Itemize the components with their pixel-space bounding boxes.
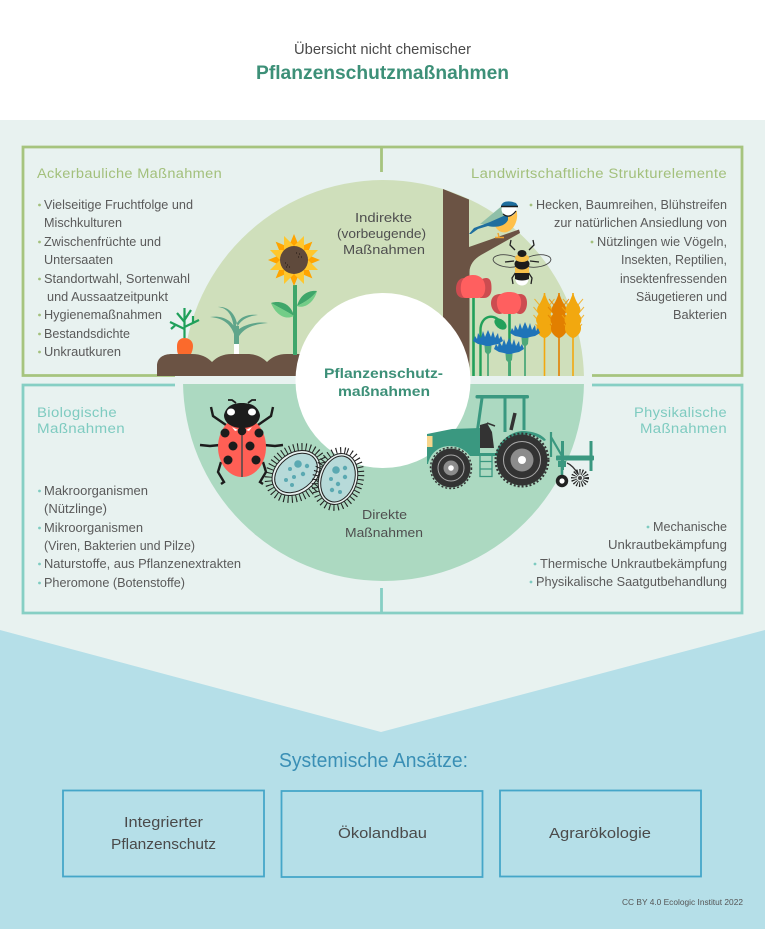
- centre label: maßnahmen: [338, 383, 430, 399]
- list: Physikalische Saatgutbehandlung: [536, 575, 727, 589]
- list: Mechanische: [653, 520, 727, 534]
- icon: carrot: [170, 308, 199, 354]
- icon: leek: [210, 307, 268, 354]
- box: Integrierter Pflanzenschutz: Integrierter: [124, 814, 203, 831]
- icon: ladybug: [200, 400, 283, 484]
- box: Integrierter Pflanzenschutz: Pflanzenschutz: [111, 836, 216, 853]
- list: Mischkulturen: [44, 216, 122, 230]
- list: Zwischenfrüchte und: [44, 235, 161, 249]
- heading: Maßnahmen: [640, 421, 727, 436]
- panel: pale background band: [0, 120, 765, 740]
- icon: microorganism right: [309, 446, 367, 512]
- frame: upper panels outline: [23, 147, 742, 376]
- list: Vielseitige Fruchtfolge und: [44, 198, 193, 212]
- box: Agrarökologie: [500, 790, 701, 876]
- icon: microorganism left: [259, 437, 333, 509]
- icon: bumblebee: [492, 240, 552, 286]
- panel: Physikalische Maßnahmen: [530, 405, 727, 589]
- frame: lower panels outline: [23, 385, 742, 613]
- list: Hygienemaßnahmen: [44, 308, 162, 322]
- list: Untersaaten: [44, 253, 113, 267]
- title: Übersicht nicht chemischer: [294, 40, 471, 58]
- label: direct measures: Maßnahmen: [345, 525, 423, 540]
- list: (Nützlinge): [44, 502, 107, 516]
- label: direct measures: Direkte: [362, 507, 407, 522]
- icon: white centre circle: [296, 293, 470, 468]
- list: Standortwahl, Sortenwahl: [44, 272, 190, 286]
- label: indirect measures: Maßnahmen: [343, 242, 425, 257]
- heading: Maßnahmen: [37, 421, 125, 436]
- credit: CC BY 4.0 Ecologic Institut 2022: [622, 897, 743, 907]
- centre label: Pflanzenschutz-: [324, 365, 443, 381]
- list: Hecken, Baumreihen, Blühstreifen: [536, 198, 727, 212]
- centre label: [324, 365, 443, 399]
- list: [530, 520, 727, 589]
- icon: tree: [443, 189, 520, 376]
- panel: upper half circle, indirect measures: [188, 180, 584, 376]
- title: [256, 40, 509, 84]
- panel: Ackerbauliche Maßnahmen: [37, 166, 222, 359]
- label: indirect measures: (vorbeugende): [337, 226, 426, 241]
- heading: [634, 405, 727, 436]
- list: [38, 198, 193, 359]
- box: Ökolandbau: Ökolandbau: [338, 824, 427, 842]
- box: Agrarökologie: Agrarökologie: [549, 825, 651, 842]
- label: direct measures: [345, 507, 423, 540]
- box: Integrierter Pflanzenschutz: [63, 790, 264, 876]
- icon: sunflower: [268, 234, 320, 355]
- icon: tractor: [427, 395, 594, 488]
- icon: poppies and cornflowers: [456, 275, 540, 376]
- heading: [37, 405, 125, 436]
- heading: Landwirtschaftliche Strukturelemente: [471, 166, 727, 181]
- panel: blue chevron bottom section: [0, 630, 765, 929]
- icon: wheat ears: [534, 293, 584, 376]
- label: indirect measures: [337, 210, 426, 257]
- list: Bakterien: [673, 308, 727, 322]
- heading: Physikalische: [634, 405, 727, 420]
- list: Säugetieren und: [636, 290, 727, 304]
- heading: Biologische: [37, 405, 117, 420]
- panel: lower half circle, direct measures: [183, 384, 584, 581]
- list: und Aussaatzeitpunkt: [47, 290, 169, 304]
- list: Unkrautbekämpfung: [608, 538, 727, 552]
- title: Pflanzenschutzmaßnahmen: [256, 63, 509, 84]
- list: Insekten, Reptilien,: [621, 253, 727, 267]
- list: [530, 198, 727, 322]
- list: Pheromone (Botenstoffe): [44, 576, 185, 590]
- list: (Viren, Bakterien und Pilze): [44, 539, 195, 553]
- heading: Ackerbauliche Maßnahmen: [37, 166, 222, 181]
- list: Mikroorganismen: [44, 521, 143, 535]
- list: insektenfressenden: [620, 272, 727, 286]
- label: indirect measures: Indirekte: [355, 210, 412, 225]
- heading: Systemische Ansätze: Systemische Ansätze:: [279, 750, 468, 772]
- list: Thermische Unkrautbekämpfung: [540, 557, 727, 571]
- panel: Biologische Maßnahmen: [37, 405, 241, 590]
- list: Makroorganismen: [44, 484, 148, 498]
- list: Naturstoffe, aus Pflanzenextrakten: [44, 557, 241, 571]
- icon: blue tit bird: [469, 201, 518, 238]
- list: [38, 484, 241, 590]
- icon: soil: [157, 354, 310, 376]
- box: Ökolandbau: [282, 791, 482, 877]
- list: Bestandsdichte: [44, 327, 130, 341]
- list: zur natürlichen Ansiedlung von: [554, 216, 727, 230]
- panel: Landwirtschaftliche Strukturelemente: [471, 166, 727, 322]
- list: Unkrautkuren: [44, 345, 121, 359]
- list: Nützlingen wie Vögeln,: [597, 235, 727, 249]
